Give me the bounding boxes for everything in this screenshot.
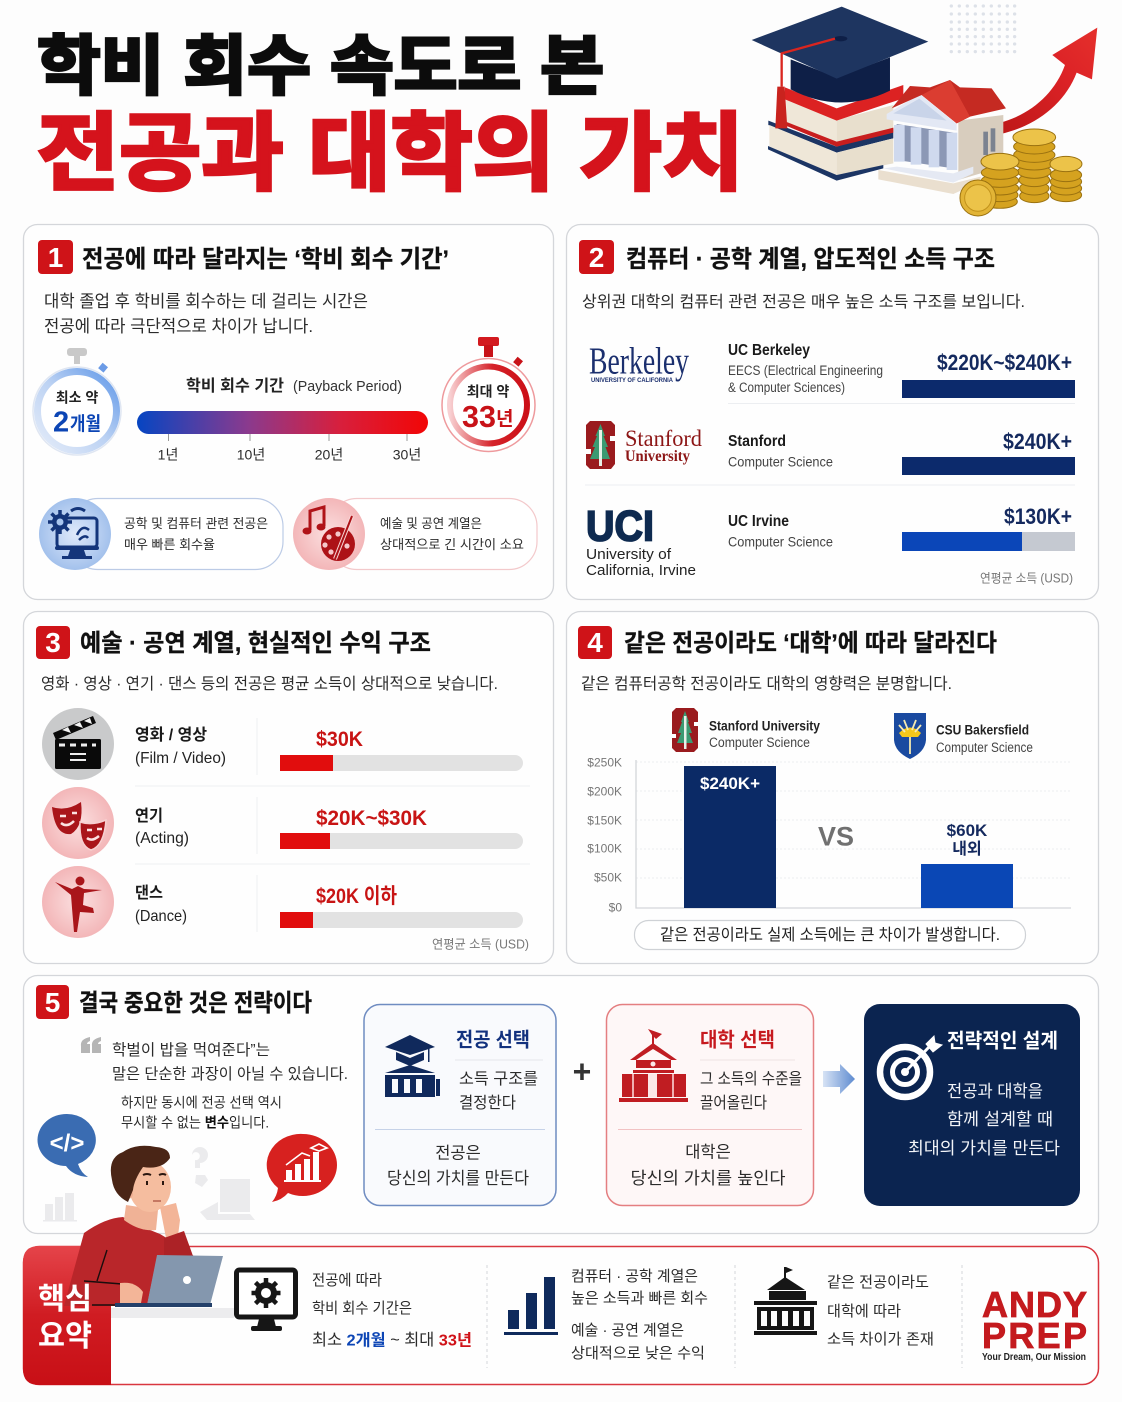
bar: Stanford: $240K+ [700,774,760,793]
title line 2: 전공과 대학의 가치 [37,107,744,202]
icon: bar chart [504,1277,558,1335]
legend: Stanford University [672,708,820,752]
unit note: 연평균 소득 (USD) [432,938,529,952]
row: dance: $20K 이하 [316,885,397,908]
intro text: 같은 컴퓨터공학 전공이라도 대학의 영향력은 분명합니다. [581,675,952,693]
summary text 1: 학비 회수 기간은 [312,1300,412,1317]
card: strategic design: 최대의 가치를 만든다 [908,1139,1060,1158]
row: acting [42,787,523,859]
summary text 3: 소득 차이가 존재 [827,1331,934,1348]
label: key summary: 요약 [38,1320,92,1353]
card: major choice: 당신의 가치를 만든다 [387,1169,529,1188]
panel 2: computer & engineering income [566,224,1098,600]
badge 4: 4 [587,627,603,658]
intro text: 영화 · 영상 · 연기 · 댄스 등의 전공은 평균 소득이 상대적으로 낮습니다. [41,675,498,693]
logo: UCI: California, Irvine [586,562,696,579]
payback gradient scale: (Payback Period) [293,378,402,395]
plus sign: + [573,1054,591,1090]
bar chart: $150K [587,814,622,828]
logo: Berkeley: Berkeley [589,340,689,382]
logo: Stanford: Stanford [625,426,702,451]
red arrow [1000,28,1097,134]
logo: ANDY PREP: PREP [982,1315,1087,1356]
bar chart: $200K [587,784,622,798]
row: Stanford: Stanford [728,433,786,450]
eyes and mouth [143,1174,166,1185]
icon: target [880,1036,942,1097]
summary text 2: 상대적으로 낮은 수익 [571,1345,705,1362]
stopwatch: maximum 33 years [442,337,535,452]
callout: arts long payback: 상대적으로 긴 시간이 소요 [380,537,524,552]
icon: computer with gear [39,498,111,570]
row: UC Irvine: Computer Science [728,534,833,550]
logo: UCI: University of [586,546,672,563]
card: college choice: 당신의 가치를 높인다 [630,1169,786,1188]
row: Stanford: $240K+ [1003,429,1072,454]
card: strategic design [864,1004,1080,1206]
raised arm sleeve [164,1231,193,1258]
payback gradient scale: 10년 [237,446,265,462]
bar: CSU Bakersfield [921,821,1013,908]
row: Stanford: Computer Science [728,454,833,470]
row: film: $30K [316,728,363,751]
icon: music note and palette [293,498,365,570]
head [129,1162,171,1212]
stopwatch: minimum 2 months: 최소 약 [56,390,98,406]
heading 3: 예술 · 공연 계열, 현실적인 수익 구조 [80,630,431,657]
summary text 1 [312,1272,472,1349]
card: major choice: 전공은 [435,1144,481,1162]
row: UC Irvine: $130K+ [1004,504,1072,529]
logo: UCI: UCI [586,502,654,550]
quote text: 하지만 동시에 전공 선택 역시 [121,1094,282,1110]
logo: Berkeley: UNIVERSITY OF CALIFORNIA [591,377,673,384]
arrow [823,1064,855,1094]
red label block [23,1246,111,1385]
summary text 1: 전공에 따라 [312,1272,382,1289]
stopwatch: maximum 33 years: 년 [496,408,513,430]
intro text [44,292,368,336]
sweater body [64,1217,194,1306]
intro text: 대학 졸업 후 학비를 회수하는 데 걸리는 시간은 [44,292,368,311]
summary text 3: 같은 전공이라도 [827,1274,929,1291]
panel 5: strategy [24,976,1098,1234]
card: college choice: 그 소득의 수준을 [700,1070,802,1088]
coins [960,129,1082,216]
payback gradient scale: 30년 [393,446,421,462]
payback gradient scale [137,377,428,462]
row: film: 영화 / 영상 [135,726,207,744]
bar chart: $50K [594,870,622,884]
lower book [768,121,893,153]
upper book [786,100,837,142]
summary text 3 [827,1274,934,1348]
card: major choice [364,1004,556,1206]
quote text: 무시할 수 없는 변수입니다. [121,1114,269,1130]
badge 4 [578,626,612,659]
payback gradient scale: 학비 회수 기간 [186,377,284,395]
quote text [81,1037,348,1130]
payback gradient scale: 20년 [315,446,343,462]
icon: graduate building [385,1035,440,1097]
illustration: student with laptop [64,1146,234,1318]
card: college choice: 대학은 [685,1142,731,1162]
bank [878,170,981,194]
card: major choice: 소득 구조를 [459,1071,538,1088]
legend: Stanford University: Computer Science [709,735,810,750]
row: UC Berkeley: $220K~$240K+ [937,350,1072,375]
heading 1: 전공에 따라 달라지는 ‘학비 회수 기간’ [82,246,449,273]
row: dance [42,866,523,938]
logo: ANDY PREP: ANDY [982,1284,1087,1325]
icon: clapperboard [42,708,114,780]
hand at chin [160,1203,180,1238]
panel 4: same major different university [566,612,1098,964]
row: Stanford [586,421,1075,475]
card: major choice: 전공 선택 [456,1028,530,1052]
VS label: VS [818,822,854,852]
summary text 2: 컴퓨터 · 공학 계열은 [571,1268,698,1285]
badge 2 [579,240,614,274]
bar chart [587,756,1071,914]
callout: engineering fast payback [39,498,283,570]
stopwatch: minimum 2 months: 개월 [70,413,101,435]
row: UC Berkeley [589,340,1075,398]
title line 1: 학비 회수 속도로 본 [37,30,604,103]
icon: quote mark [81,1037,101,1053]
summary text 2: 높은 소득과 빠른 회수 [571,1290,708,1307]
row: dance: 댄스 [135,884,163,902]
icon: university building [754,1267,817,1335]
callout: engineering fast payback: 매우 빠른 회수율 [124,537,215,552]
legend: CSU Bakersfield [894,713,1033,759]
panel 3: arts income [24,612,554,964]
legend: CSU Bakersfield: CSU Bakersfield [936,722,1029,738]
badge 1 [38,240,73,274]
legend: Stanford University: Stanford University [709,718,820,734]
bubble: chart [267,1134,337,1202]
callout: arts long payback [293,498,537,570]
heading 2: 컴퓨터 · 공학 계열, 압도적인 소득 구조 [626,246,995,273]
label: key summary [38,1283,92,1353]
bar: CSU Bakersfield: 내외 [952,840,982,858]
bar: Stanford [684,766,776,908]
label: key summary: 핵심 [38,1283,92,1316]
badge 1: 1 [48,242,63,273]
badge 5: 5 [45,987,60,1018]
cap [791,57,890,102]
summary text 2: 예술 · 공연 계열은 [571,1322,684,1339]
stopwatch: minimum 2 months: 2 [53,406,69,438]
logo: Stanford [586,421,702,469]
summary text 3: 대학에 따라 [827,1303,901,1320]
conclusion pill: 같은 전공이라도 실제 소득에는 큰 차이가 발생합니다. [660,926,1000,944]
quote text: 학벌이 밥을 먹여준다”는 [112,1041,270,1059]
icon: theater masks [42,787,114,859]
summary text 2 [571,1268,708,1362]
bubble: code: </> [50,1130,84,1157]
legend: CSU Bakersfield: Computer Science [936,740,1033,755]
row: acting: $20K~$30K [316,807,427,830]
bar chart: $0 [609,900,622,914]
summary text 1: 최소 2개월 ~ 최대 33년 [312,1331,472,1349]
laptop [147,1255,223,1305]
row: UC Irvine [586,502,1075,579]
card: college choice: 끌어올린다 [700,1094,767,1112]
hero illustration: cap, books, bank, coins, arrow [752,4,1097,216]
badge 5 [36,985,69,1019]
logo: ANDY PREP: Your Dream, Our Mission [982,1352,1086,1363]
row: dance: (Dance) [135,908,187,925]
panel: key summary [23,1246,1098,1385]
card: strategic design: 전략적인 설계 [947,1030,1058,1052]
panel 1: payback period [24,224,554,600]
bubble: code [38,1114,96,1177]
icon: monitor with gear [236,1270,296,1331]
bar: CSU Bakersfield: $60K [947,821,988,840]
payback gradient scale: 1년 [158,446,178,462]
row: acting: 연기 [135,807,163,825]
hair [111,1146,170,1202]
card: college choice: 대학 선택 [700,1028,775,1052]
row: film: (Film / Video) [135,750,226,767]
callout: arts long payback: 예술 및 공연 계열은 [380,516,482,531]
typing hand [120,1283,143,1303]
conclusion pill [634,920,1026,950]
logo: ANDY PREP [982,1284,1087,1363]
intro text: 전공에 따라 극단적으로 차이가 납니다. [44,317,313,336]
desk [111,1308,234,1318]
row: UC Berkeley: UC Berkeley [728,342,810,359]
stopwatch: minimum 2 months [33,348,121,455]
unit note: 연평균 소득 (USD) [980,572,1073,586]
callout: engineering fast payback: 공학 및 컴퓨터 관련 전공은 [124,516,268,531]
row: acting: (Acting) [135,830,189,847]
logo: UCI [586,502,696,579]
bar chart: $250K [587,756,622,770]
card: strategic design: 전공과 대학을 [947,1082,1043,1101]
decorative faded icons [43,1147,255,1222]
row: UC Berkeley: EECS (Electrical Engineering [728,363,883,378]
heading 4: 같은 전공이라도 ‘대학’에 따라 달라진다 [624,630,997,657]
badge 3 [36,626,70,659]
card: college choice [606,1004,814,1206]
logo: Stanford: University [625,448,690,465]
row: UC Irvine: UC Irvine [728,513,789,530]
card: strategic design: 함께 설계할 때 [947,1110,1053,1129]
bar chart: $100K [587,842,622,856]
title [37,30,744,202]
intro text: 상위권 대학의 컴퓨터 관련 전공은 매우 높은 소득 구조를 보입니다. [582,293,1025,311]
row: film [42,708,523,780]
heading 5: 결국 중요한 것은 전략이다 [79,990,312,1017]
dots [950,4,1016,53]
quote text: 말은 단순한 과장이 아닐 수 있습니다. [112,1065,348,1083]
badge 2: 2 [589,242,604,273]
stopwatch: maximum 33 years: 최대 약 [467,384,509,400]
badge 3: 3 [45,627,61,658]
card: major choice: 결정한다 [459,1094,516,1112]
stopwatch: maximum 33 years: 33 [462,399,496,434]
row: UC Berkeley: & Computer Sciences) [728,380,845,395]
icon: dancer [42,866,114,938]
icon: red college building [619,1029,688,1102]
neck [124,1205,158,1230]
